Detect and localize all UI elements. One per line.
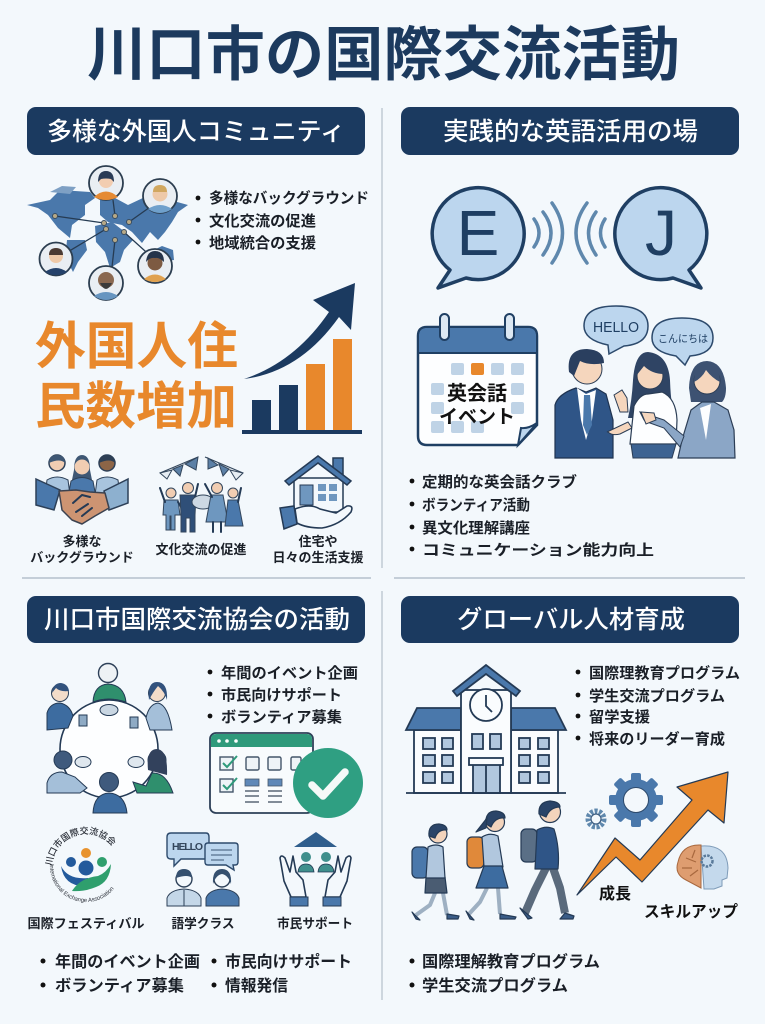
- heading: community: 多様な外国人コミュニティ: [47, 118, 345, 146]
- icon: festival crowd with bunting: [160, 457, 243, 532]
- heading: global talent: [401, 596, 739, 643]
- logo: International Exchange Association: International Exchange Association: [50, 864, 114, 903]
- label: 市民サポート: [277, 916, 353, 931]
- logo: International Exchange Association: 川口市国際交流協会: [45, 826, 116, 866]
- bullet list: community: 地域統合の支援: [209, 235, 316, 252]
- panel: 実践的な英語活用の場: [401, 107, 739, 559]
- panel: 川口市国際交流協会の活動: [27, 596, 365, 995]
- icon: brain and head: [677, 845, 728, 889]
- bullet list: association bottom: 年間のイベント企画: [55, 952, 200, 971]
- label: バックグラウンド: [30, 550, 134, 565]
- icon: event calendar: イベント: [439, 407, 515, 428]
- label: 文化交流の促進: [155, 542, 247, 557]
- icon: J speech bubble: J: [645, 197, 677, 269]
- label: 日々の生活支援: [272, 550, 364, 565]
- icon: E speech bubble: [432, 188, 524, 288]
- heading: community: [27, 107, 365, 155]
- world map with avatars: [27, 166, 188, 300]
- bullet list: association bottom: [40, 952, 352, 995]
- icon: event calendar: [418, 314, 537, 445]
- bullet list: english: ボランティア活動: [422, 497, 530, 514]
- bubble: こんにちは: こんにちは: [658, 333, 708, 345]
- bubble: HELLO: HELLO: [593, 319, 639, 336]
- label: 国際フェスティバル: [28, 916, 144, 931]
- panel: グローバル人材育成: [401, 596, 740, 995]
- avatar 4: [138, 249, 172, 283]
- bullet list: association top: [208, 664, 358, 726]
- avatar 3: [40, 242, 72, 276]
- bullet list: global talent: 学生交流プログラム: [589, 687, 725, 705]
- logo: International Exchange Association: [45, 826, 116, 903]
- heading: association: 川口市国際交流協会の活動: [44, 606, 350, 634]
- illustration: three people talking: [555, 349, 735, 458]
- icon: handshake group: [36, 455, 128, 524]
- heading: global talent: グローバル人材育成: [457, 606, 685, 634]
- panel: 多様な外国人コミュニティ: [27, 107, 369, 565]
- big orange headline: 民数増加: [35, 378, 237, 435]
- icon: orange growth arrow: [577, 772, 728, 895]
- icon: language class: [167, 833, 239, 906]
- bubble: HELLO: [584, 306, 648, 354]
- bullet list: association bottom: ボランティア募集: [55, 976, 184, 995]
- bullet list: english: 異文化理解講座: [422, 519, 530, 537]
- bullet list: global talent: 将来のリーダー育成: [589, 730, 725, 748]
- bar chart with rising arrow: [242, 283, 362, 434]
- icon: school building: [406, 665, 566, 793]
- big orange headline: 外国人住: [35, 318, 238, 375]
- bullet list: community: 文化交流の促進: [209, 212, 316, 230]
- bullet list: association bottom: 情報発信: [225, 976, 288, 995]
- heading: english: 実践的な英語活用の場: [443, 118, 698, 146]
- bubble: こんにちは: [652, 318, 713, 365]
- icon: J speech bubble: [615, 188, 707, 288]
- bullet list: association top: 年間のイベント企画: [221, 664, 358, 682]
- bullet list: community: 多様なバックグラウンド: [209, 189, 369, 207]
- label: 多様な: [62, 534, 102, 549]
- bullet list: english: [410, 473, 654, 559]
- icon: event calendar: 英会話: [447, 382, 507, 405]
- avatar 1: [89, 166, 123, 200]
- bullet list: association bottom: 市民向けサポート: [225, 952, 352, 971]
- label: 住宅や: [298, 534, 338, 549]
- label: skill up: スキルアップ: [644, 903, 738, 921]
- bullet list: global talent: [576, 664, 740, 748]
- bullet list: english: 定期的な英会話クラブ: [422, 473, 577, 491]
- avatar 5: [89, 266, 123, 300]
- heading: english: [401, 107, 739, 155]
- label: growth: 成長: [599, 884, 631, 903]
- illustration: round table meeting: [47, 664, 173, 813]
- icon: gears: [588, 773, 663, 827]
- bullet list: global talent bottom: 国際理解教育プログラム: [422, 952, 600, 971]
- bullet list: global talent bottom: [410, 952, 600, 995]
- bullet list: community: [196, 189, 369, 252]
- bullet list: global talent: 国際理教育プログラム: [589, 664, 740, 682]
- bullet list: association top: ボランティア募集: [221, 708, 342, 726]
- icon: sound waves: [534, 203, 605, 263]
- avatar 2: [143, 179, 177, 213]
- heading: association: [27, 596, 365, 643]
- icon: E speech bubble: E: [457, 197, 499, 269]
- bullet list: global talent bottom: 学生交流プログラム: [422, 976, 568, 995]
- icon: house in hand: [280, 456, 352, 529]
- label: 語学クラス: [172, 916, 234, 931]
- bullet list: english: コミュニケーション能力向上: [422, 541, 654, 559]
- title: 川口市の国際交流活動: [87, 22, 680, 88]
- icon: citizen support hands: [280, 832, 351, 906]
- icon: language class: HELLO: [172, 841, 203, 853]
- illustration: students walking: [412, 801, 574, 920]
- bullet list: association top: 市民向けサポート: [221, 686, 342, 704]
- icon: schedule screen with check: [210, 733, 363, 818]
- bullet list: global talent: 留学支援: [589, 708, 650, 726]
